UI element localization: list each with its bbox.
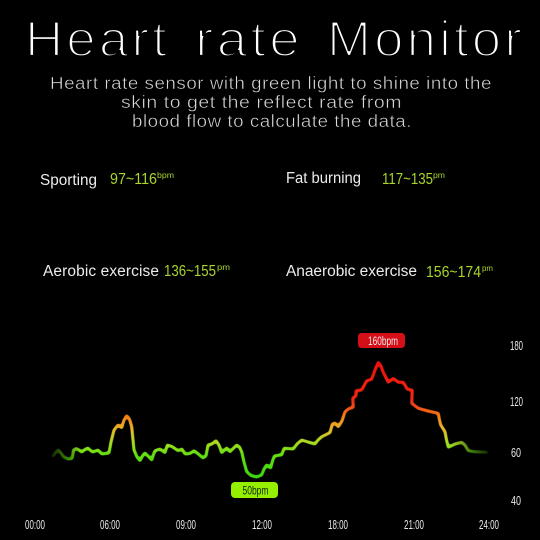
callout: peak 160bpm: 160bpm (368, 336, 398, 348)
stat: anaerobic exercise: 156~174 (426, 264, 481, 281)
stat: fat burning: pm (433, 171, 445, 180)
y axis labels (510, 339, 523, 508)
stat: sporting (40, 171, 174, 189)
y axis labels: 40 (511, 494, 521, 508)
stat: anaerobic exercise (286, 263, 493, 281)
x axis time labels: 06:00 (100, 518, 120, 532)
heart rate line chart (53, 362, 487, 477)
x axis time labels: 21:00 (404, 518, 424, 532)
stat: sporting: Sporting (40, 172, 97, 189)
description text: skin to get the reflect rate from (121, 92, 402, 112)
x axis time labels: 09:00 (176, 518, 196, 532)
stat: aerobic exercise: Aerobic exercise (43, 263, 159, 280)
title: Heart (25, 11, 170, 67)
y axis labels: 60 (511, 446, 521, 460)
description text: blood flow to calculate the data. (132, 111, 412, 131)
stat: sporting: bpm (157, 171, 174, 180)
title: rate (195, 11, 303, 67)
stat: sporting: 97~116 (110, 171, 157, 188)
stat: anaerobic exercise: Anaerobic exercise (286, 263, 417, 280)
x axis time labels: 18:00 (328, 518, 348, 532)
x axis time labels: 00:00 (25, 518, 45, 532)
stat: anaerobic exercise: pm (482, 264, 493, 273)
x axis time labels (25, 518, 499, 532)
callout: low 50bpm (231, 482, 278, 498)
description text (50, 73, 492, 131)
stat: fat burning: 117~135 (382, 171, 433, 188)
stat: fat burning: Fat burning (286, 170, 361, 187)
callout: peak 160bpm (358, 333, 405, 348)
y axis labels: 120 (510, 395, 523, 409)
description text: Heart rate sensor with green light to shine into the (50, 73, 492, 93)
callout: low 50bpm: 50bpm (242, 484, 268, 498)
stat: aerobic exercise: 136~155 (164, 263, 216, 280)
x axis time labels: 24:00 (479, 518, 499, 532)
title (25, 11, 525, 67)
title: Monitor (327, 11, 525, 67)
x axis time labels: 12:00 (252, 518, 272, 532)
stat: aerobic exercise: pm (217, 263, 230, 272)
stat: aerobic exercise (43, 263, 230, 280)
y axis labels: 180 (510, 339, 523, 353)
stat: fat burning (286, 170, 445, 188)
